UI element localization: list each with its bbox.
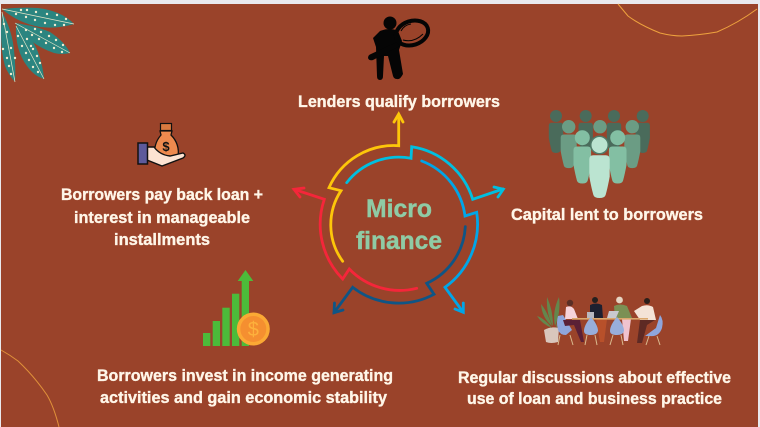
- decoration: bottom left curve: [1, 350, 59, 427]
- cycle diagram: [294, 114, 503, 313]
- icon: hand holding money bag: $: [162, 139, 170, 154]
- label: capital lent to borrowers: Capital lent to borrowers: [511, 206, 703, 224]
- icon: group of people: [549, 110, 650, 198]
- text: regular discussions: use of loan and business practice: [467, 390, 722, 408]
- text: borrowers pay back loan: interest in manageable: [74, 209, 250, 227]
- person third: [614, 297, 632, 341]
- center label: micro finance: finance: [356, 227, 442, 255]
- text: borrowers invest: activities and gain economic stability: [100, 389, 388, 407]
- center label: micro finance: [356, 195, 442, 255]
- icon: team meeting around table: [537, 297, 663, 345]
- table and laptops: [572, 311, 648, 320]
- person left with chair: [557, 300, 584, 345]
- arrow: yellow segment: [329, 114, 403, 261]
- text: regular discussions: Regular discussions about effective: [458, 369, 731, 387]
- icon: person with magnifying glass: [368, 16, 431, 80]
- front chairs: [584, 317, 624, 345]
- icon: growth bar chart with coin: $: [248, 319, 259, 341]
- decoration: top right curve: [618, 4, 757, 36]
- heading: lenders qualify borrowers: Lenders qualify borrowers: [298, 93, 500, 111]
- person second: [590, 297, 607, 342]
- arrow: red segment: [294, 188, 417, 290]
- text: borrowers pay back loan: [61, 186, 263, 249]
- arrow: cyan segment: [347, 147, 503, 199]
- icon: hand holding money bag: [138, 124, 185, 166]
- text: borrowers invest: Borrowers invest in income generating: [97, 367, 393, 385]
- text: borrowers pay back loan: installments: [114, 231, 210, 249]
- text: borrowers pay back loan: Borrowers pay back loan +: [61, 186, 263, 204]
- arrow: blue segment: [422, 161, 478, 312]
- center label: micro finance: Micro: [366, 195, 432, 223]
- person right with chair: [634, 298, 663, 345]
- plant: [537, 297, 563, 343]
- decoration: teal leaves: [1, 8, 74, 82]
- text: regular discussions: [458, 369, 731, 408]
- text: borrowers invest: [97, 367, 393, 407]
- arrow: navy segment: [334, 227, 465, 313]
- icon: growth bar chart with coin: [203, 270, 270, 346]
